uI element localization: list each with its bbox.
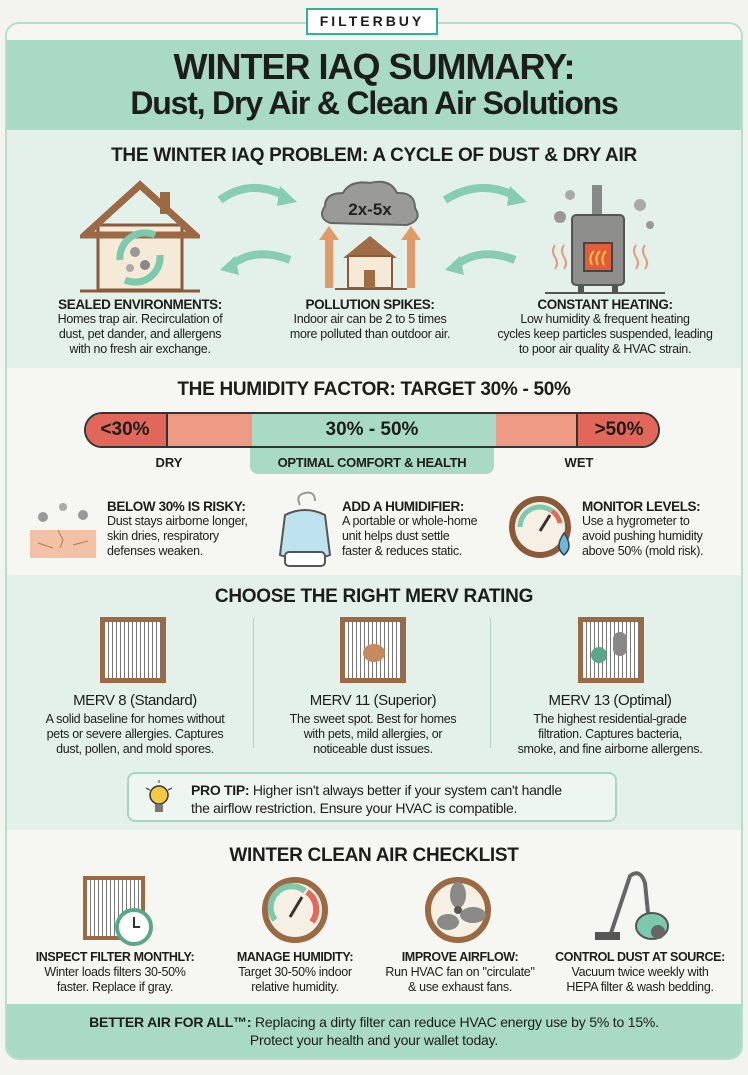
merv 11 text: noticeable dust issues.	[313, 742, 433, 756]
text: sealed environments	[58, 297, 223, 356]
checklist text 2: relative humidity.	[251, 980, 339, 994]
checklist text 2: MANAGE HUMIDITY:	[237, 950, 353, 964]
text: sealed environments: Homes trap air. Recirculation of	[58, 312, 222, 326]
icon: merv 8 filter	[100, 617, 166, 683]
section 1 background	[7, 130, 741, 368]
bar labels: <30%	[100, 419, 150, 440]
text: constant heating: cycles keep particles suspended, leading	[497, 327, 713, 341]
merv 11 text: with pets, mild allergies, or	[304, 727, 442, 741]
merv 8 text	[46, 692, 225, 756]
text: add humidifier: ADD A HUMIDIFIER:	[342, 499, 464, 514]
text: constant heating: CONSTANT HEATING:	[537, 297, 673, 312]
text: monitor levels: avoid pushing humidity	[582, 529, 703, 543]
merv 8 text: dust, pollen, and mold spores.	[56, 742, 214, 756]
checklist text 1: Winter loads filters 30-50%	[44, 965, 186, 979]
checklist text 3	[385, 950, 535, 994]
icon: hygrometer	[509, 496, 571, 558]
text: below 30%: skin dries, respiratory	[107, 529, 219, 543]
text: add humidifier: unit helps dust settle	[342, 529, 449, 543]
pro tip callout: PRO TIP: Higher isn't always better if your system can't handle	[191, 782, 562, 798]
text: constant heating: to poor air quality & HVAC strain.	[519, 342, 691, 356]
humidity bar	[84, 412, 660, 474]
merv 13 text: MERV 13 (Optimal)	[549, 692, 671, 709]
icon: humidity gauge	[262, 877, 328, 943]
text: sealed environments: SEALED ENVIRONMENTS:	[58, 297, 222, 312]
icon: pollution cloud house	[319, 180, 421, 290]
footer banner: Protect your health and your wallet today.	[250, 1032, 498, 1048]
text: add humidifier: A portable or whole-home	[342, 514, 477, 528]
text: pollution spikes: Indoor air can be 2 to 5 times	[294, 312, 446, 326]
logo: FILTERBUY	[320, 13, 424, 29]
text: below 30%	[107, 499, 248, 558]
text: add humidifier	[342, 499, 477, 558]
title: WINTER IAQ SUMMARY:	[174, 46, 574, 87]
text: below 30%: Dust stays airborne longer,	[107, 514, 248, 528]
checklist text 4: CONTROL DUST AT SOURCE:	[555, 950, 725, 964]
subtitle: Dust, Dry Air & Clean Air Solutions	[130, 85, 618, 121]
checklist text 1	[36, 950, 194, 994]
section 3 background	[7, 575, 741, 830]
icon: bulb	[146, 780, 172, 812]
checklist text 4: HEPA filter & wash bedding.	[566, 980, 714, 994]
text: monitor levels: Use a hygrometer to	[582, 514, 690, 528]
text: monitor levels: MONITOR LEVELS:	[582, 499, 700, 514]
text: constant heating: Low humidity & frequent heating	[520, 312, 690, 326]
checklist text 1: faster. Replace if gray.	[57, 980, 173, 994]
text: sealed environments: dust, pet dander, and allergens	[59, 327, 221, 341]
humidity bar: OPTIMAL COMFORT & HEALTH	[278, 455, 466, 470]
logo	[306, 8, 438, 35]
checklist text 1: INSPECT FILTER MONTHLY:	[36, 950, 194, 964]
merv 11 text: MERV 11 (Superior)	[310, 692, 436, 709]
merv 8 text: A solid baseline for homes without	[46, 712, 224, 726]
text: below 30%: defenses weaken.	[107, 544, 203, 558]
humidity bar: 30% - 50%	[326, 419, 418, 440]
icon: humidifier	[278, 492, 332, 567]
text: sealed environments: with no fresh air exchange.	[69, 342, 211, 356]
arrows: cycle	[218, 184, 527, 275]
pro tip callout: the airflow restriction. Ensure your HVAC is compatible.	[191, 800, 517, 816]
merv 13 text: smoke, and fine airborne allergens.	[518, 742, 702, 756]
icon: merv 13 filter	[578, 617, 644, 683]
heading: winter iaq problem: THE WINTER IAQ PROBLEM: A CYCLE OF DUST & DRY AIR	[111, 145, 637, 166]
heading: humidity factor: THE HUMIDITY FACTOR: TARGET 30% - 50%	[177, 379, 571, 400]
icon: vacuum	[595, 871, 669, 940]
text: monitor levels	[582, 499, 703, 558]
humidity bar: >50%	[594, 419, 644, 440]
text: constant heating	[497, 297, 713, 356]
text: add humidifier: faster & reduces static.	[342, 544, 462, 558]
column dividers	[253, 618, 254, 748]
text: pollution spikes: more polluted than outdoor air.	[290, 327, 450, 341]
checklist text 2	[237, 950, 353, 994]
text: monitor levels: above 50% (mold risk).	[582, 544, 703, 558]
merv 11 text: The sweet spot. Best for homes	[290, 712, 456, 726]
icon: stove heater	[545, 185, 665, 294]
humidity bar: WET	[565, 455, 593, 470]
checklist text 3: Run HVAC fan on "circulate"	[385, 965, 535, 979]
humidity bar: DRY	[156, 455, 182, 470]
icon: filter clock	[83, 876, 153, 946]
text: pollution spikes: POLLUTION SPIKES:	[306, 297, 434, 312]
merv 8 text: MERV 8 (Standard)	[73, 692, 197, 709]
merv 11 text	[290, 692, 456, 756]
text: pollution spikes	[290, 297, 450, 341]
pro tip callout	[127, 772, 617, 822]
icon: pollution cloud house: 2x-5x	[348, 200, 392, 219]
merv 8 text: pets or severe allergies. Captures	[47, 727, 223, 741]
merv 13 text: filtration. Captures bacteria,	[538, 727, 682, 741]
icon: dry skin	[30, 503, 96, 558]
merv 13 text: The highest residential-grade	[533, 712, 687, 726]
merv 13 text	[518, 692, 702, 756]
footer banner	[7, 1004, 741, 1058]
icon: house recirculation	[80, 180, 200, 292]
heading: merv: CHOOSE THE RIGHT MERV RATING	[215, 586, 533, 607]
footer banner: BETTER AIR FOR ALL™: Replacing a dirty filter can reduce HVAC energy use by 5% to 15%.	[89, 1014, 659, 1030]
text: below 30%: BELOW 30% IS RISKY:	[107, 499, 245, 514]
icon: fan	[425, 877, 491, 943]
checklist text 3: IMPROVE AIRFLOW:	[402, 950, 518, 964]
checklist text 3: & use exhaust fans.	[408, 980, 512, 994]
checklist text 2: Target 30-50% indoor	[238, 965, 352, 979]
heading: checklist: WINTER CLEAN AIR CHECKLIST	[229, 845, 519, 866]
header band	[7, 40, 741, 130]
checklist text 4	[555, 950, 725, 994]
icon: merv 11 filter	[340, 617, 406, 683]
checklist text 4: Vacuum twice weekly with	[571, 965, 709, 979]
